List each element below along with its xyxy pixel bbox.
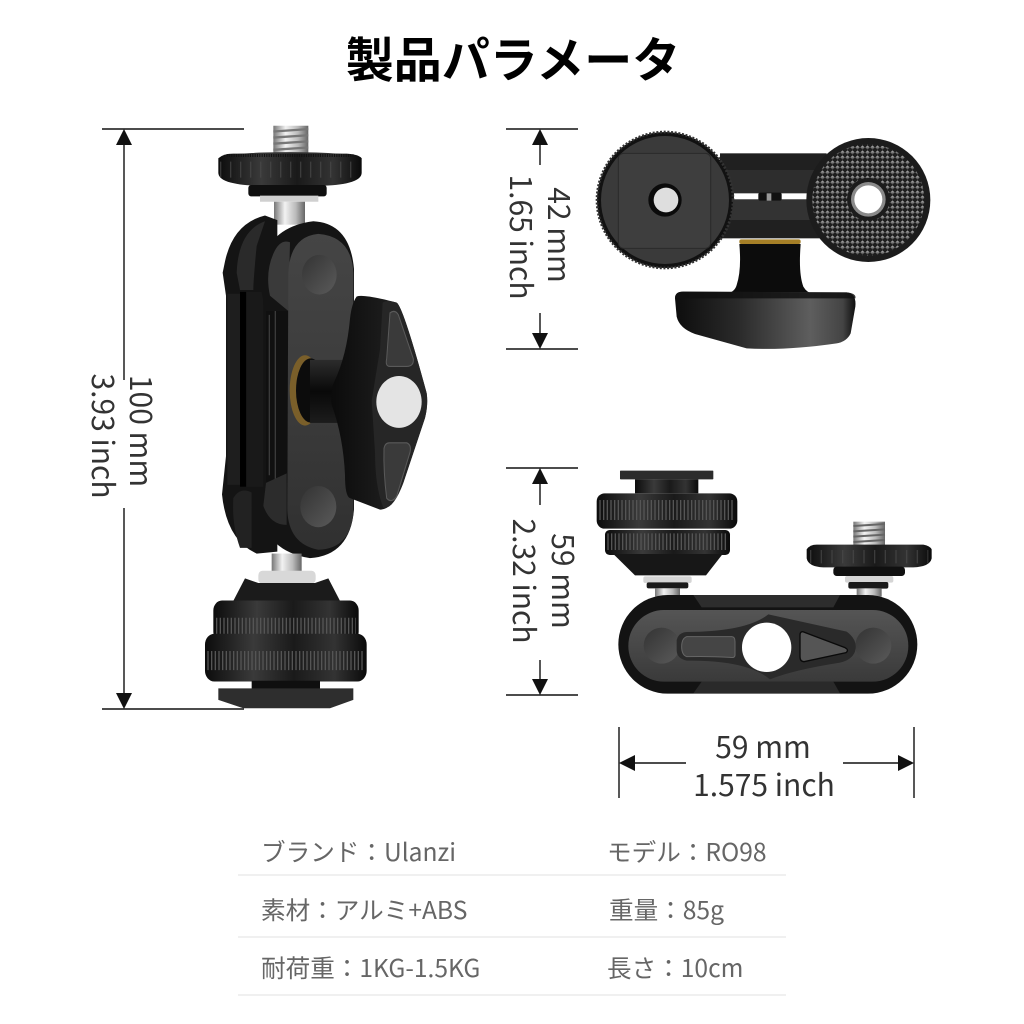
dimension: height 59 mm: 2.32 inch	[504, 518, 548, 644]
dimension: width 59 mm	[619, 723, 914, 805]
product: top view	[597, 132, 930, 349]
spec: load capacity: 耐荷重：1KG-1.5KG	[261, 949, 480, 985]
specification table	[238, 833, 786, 995]
left knurled disc	[597, 132, 733, 268]
icon: centre hole	[742, 623, 791, 672]
dimple: lower rivet	[300, 486, 336, 527]
brass ball joint	[290, 355, 343, 426]
spec: material: 素材：アルミ+ABS	[261, 891, 467, 927]
dimension: overall height 100 mm: 3.93 inch	[83, 373, 127, 499]
dimension: depth 42 mm: 1.65 inch	[501, 174, 545, 300]
centre wing inlay	[677, 614, 856, 679]
top thumb knob	[218, 152, 362, 225]
T-shaped knob	[675, 292, 855, 349]
rear arm plate	[222, 216, 277, 554]
screw mount	[807, 522, 932, 597]
icon: top screw thread	[273, 126, 308, 158]
icon: white screw	[654, 188, 678, 212]
icon: white centre cap	[376, 376, 422, 428]
dimension: overall height 100 mm	[83, 129, 244, 709]
spec: model: モデル：RO98	[607, 833, 767, 869]
pocket: right	[800, 632, 847, 662]
title: 製品パラメータ	[346, 21, 680, 91]
spec: length: 長さ：10cm	[607, 949, 743, 985]
dimension: height 59 mm	[504, 468, 587, 695]
pocket: upper triangle	[386, 311, 413, 366]
wing lock knob	[331, 296, 427, 510]
product: side view	[597, 471, 932, 694]
dimple: upper rivet	[302, 255, 337, 295]
spec: weight: 重量：85g	[609, 891, 724, 927]
right knurled disc	[806, 138, 930, 262]
pocket: left	[682, 637, 735, 658]
dimension: overall height 100 mm: 100 mm	[121, 375, 165, 487]
arm plate	[720, 153, 827, 238]
spec: brand: ブランド：Ulanzi	[261, 833, 456, 869]
dimple: right rivet	[855, 628, 891, 664]
dimension: height 59 mm: 59 mm	[543, 533, 587, 629]
arm body	[618, 595, 917, 694]
front arm plate	[258, 221, 354, 558]
square plate	[618, 153, 711, 248]
hot shoe mount	[205, 554, 367, 708]
dimple: left rivet	[644, 628, 680, 664]
dimension: width 59 mm: 59 mm	[715, 723, 811, 767]
dimension: depth 42 mm: 42 mm	[539, 187, 583, 283]
pocket: lower triangle	[384, 443, 410, 501]
hot shoe mount	[597, 471, 737, 597]
icon: centre hole	[854, 185, 882, 213]
dimension: width 59 mm: 1.575 inch	[693, 761, 835, 805]
product: front view of magic arm	[205, 126, 427, 708]
dimension: depth 42 mm	[501, 129, 583, 349]
stem and brass ring	[727, 239, 813, 294]
